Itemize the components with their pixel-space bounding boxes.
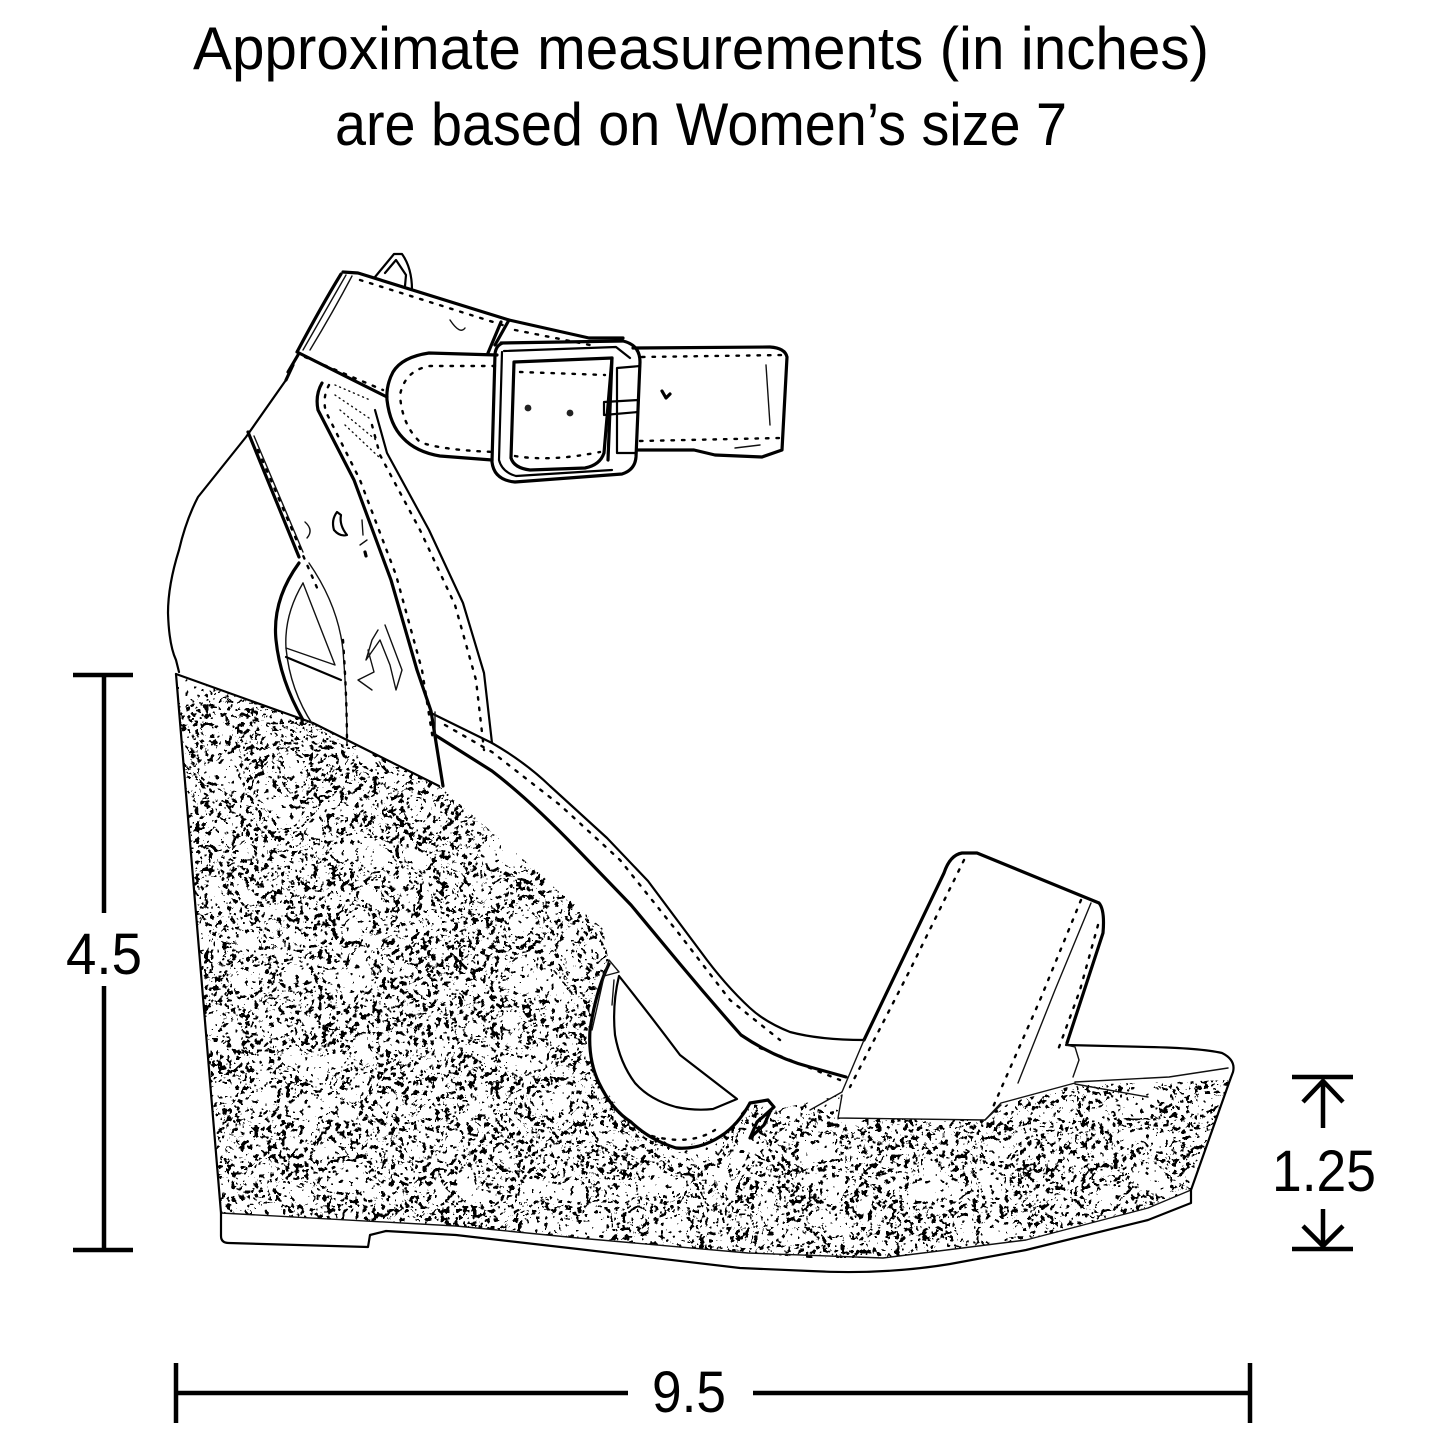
pull tab (375, 254, 412, 290)
illustration: wedge sandal line drawing (168, 254, 1235, 1272)
sole (221, 1080, 1230, 1272)
wedge outline (176, 674, 1191, 1258)
cross strap (431, 712, 864, 1080)
dimension: height 4.5 (66, 675, 142, 1250)
cork wedge texture (170, 670, 1235, 1270)
platform footbed (838, 1045, 1234, 1120)
buckle (492, 341, 640, 482)
heel counter (168, 380, 286, 672)
title (193, 15, 1209, 158)
dimension: length 9.5 (176, 1360, 1250, 1425)
strap loop (387, 353, 497, 460)
side strap seam (248, 432, 318, 590)
cut-out opening (275, 563, 347, 745)
dimension: platform 1.25 (1272, 1077, 1376, 1249)
vamp strap (810, 853, 1104, 1120)
logo marks on strap (305, 512, 402, 690)
buckle holes (525, 405, 573, 416)
dimension: height 4.5: 4.5 (66, 922, 142, 987)
arch band under strap (590, 960, 774, 1148)
ankle strap (286, 272, 623, 397)
title: Approximate measurements (in inches) (193, 15, 1209, 82)
lining shading (335, 385, 380, 458)
dimension: length 9.5: 9.5 (652, 1360, 726, 1425)
dimension: platform 1.25: 1.25 (1272, 1139, 1376, 1204)
free strap end (633, 347, 787, 457)
back stay strap (317, 383, 492, 786)
title: are based on Women’s size 7 (335, 91, 1067, 158)
